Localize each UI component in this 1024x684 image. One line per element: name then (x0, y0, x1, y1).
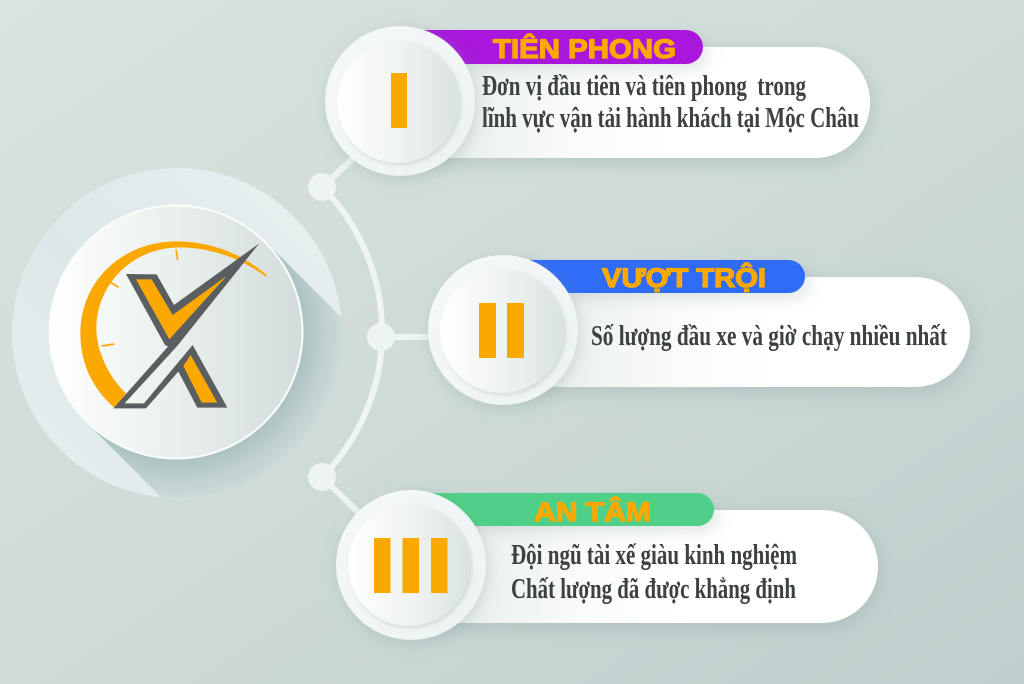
description: lĩnh vực vận tải hành khách tại Mộc Châu (482, 103, 859, 134)
text pill (480, 277, 970, 387)
upper X stroke (126, 243, 259, 347)
text pill (380, 47, 870, 158)
outer disc (12, 168, 342, 498)
panel: an tâm (336, 490, 878, 640)
speedometer ticks (102, 249, 178, 346)
connector arc with nodes (308, 152, 435, 514)
number badge III (336, 490, 486, 640)
lower X stroke (113, 345, 227, 408)
panel: tiên phong (325, 26, 870, 176)
number badge I (325, 26, 475, 176)
description (511, 540, 797, 605)
text pill (390, 510, 878, 623)
diagonal blade (113, 243, 259, 408)
header band (400, 30, 703, 64)
heading: VƯỢT TRỘI (602, 262, 766, 293)
inner disc (50, 206, 302, 458)
description (482, 71, 859, 134)
description: Chất lượng đã được khẳng định (511, 574, 796, 605)
central logo disc (12, 168, 341, 498)
description: Đội ngũ tài xế giàu kinh nghiệm (511, 540, 797, 571)
long shadow band (90, 245, 342, 498)
logo mark (80, 241, 267, 408)
heading: AN TÂM (534, 496, 651, 527)
heading: TIÊN PHONG (493, 33, 676, 64)
panel: vượt trội (428, 255, 970, 405)
number badge II (428, 255, 578, 405)
upper X fill (136, 276, 227, 339)
lower X fill (183, 355, 217, 403)
description: Đơn vị đầu tiên và tiên phong trong (482, 71, 806, 102)
speedometer arc (80, 241, 267, 408)
header band (410, 493, 714, 526)
header band (500, 260, 805, 293)
